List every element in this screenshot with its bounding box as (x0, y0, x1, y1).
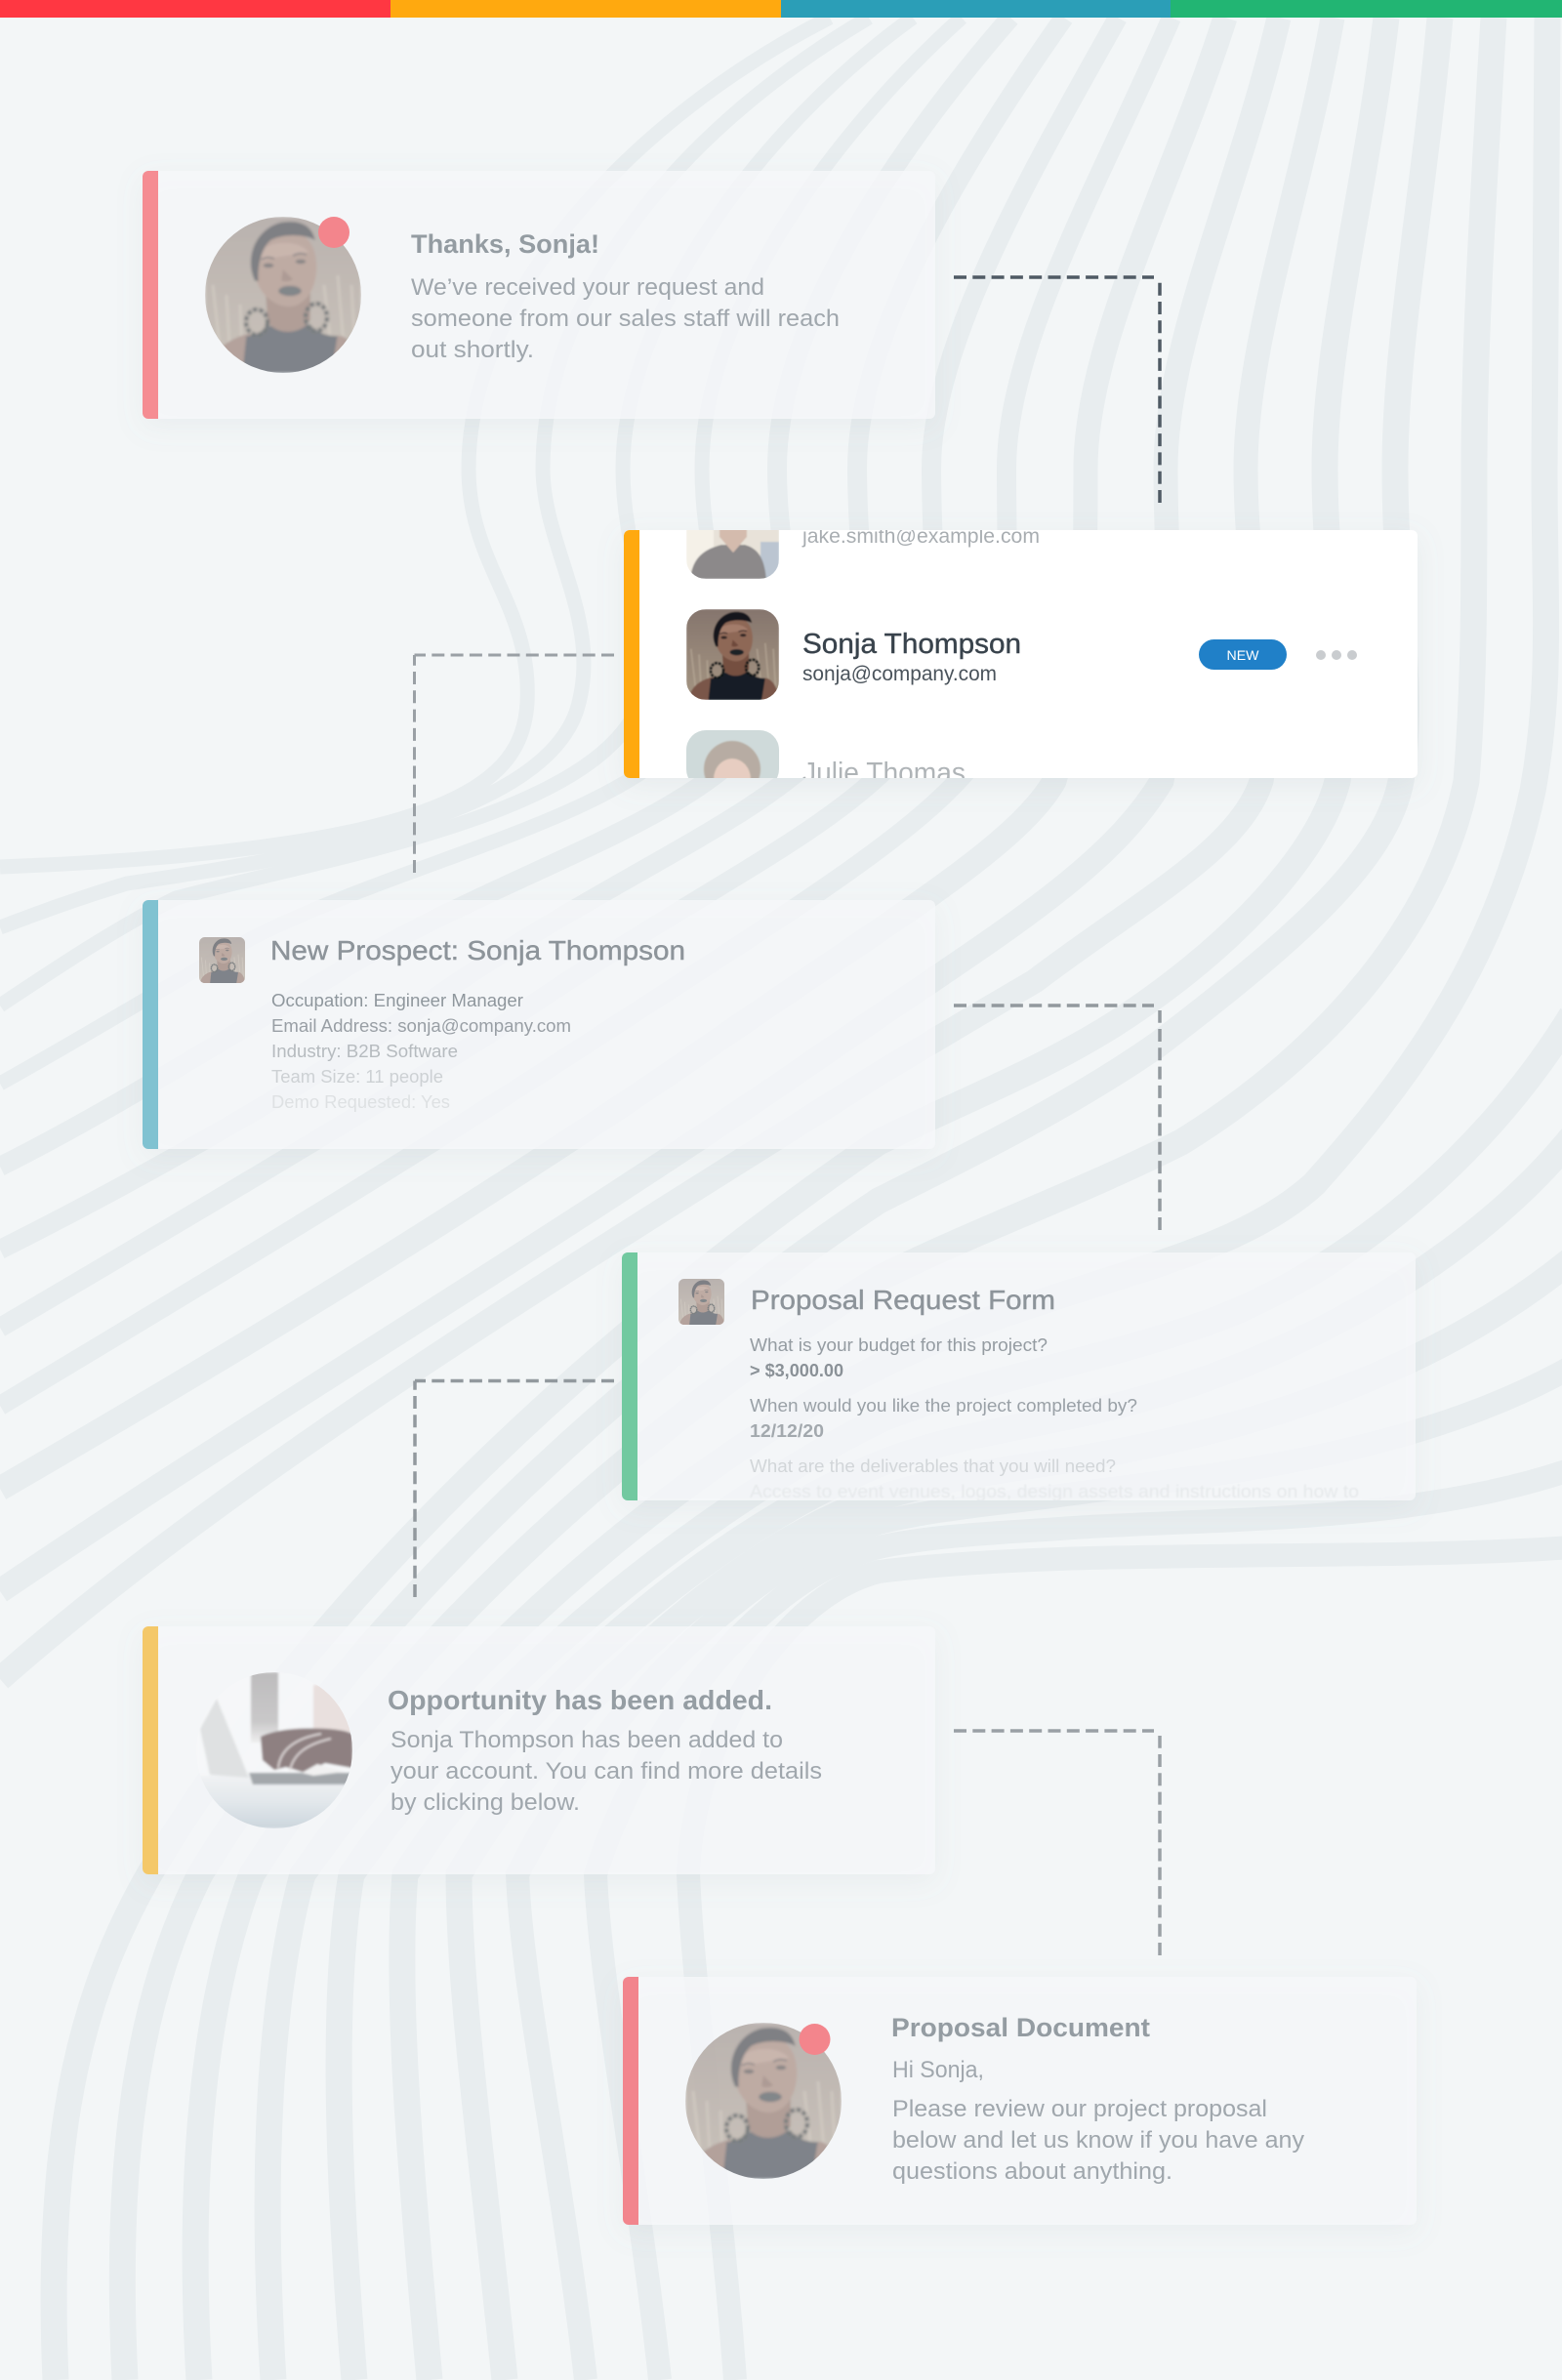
connector: card 3 to card 4 (954, 1005, 1160, 1230)
prospect details: Demo Requested: Yes (271, 1092, 450, 1112)
prospect details (271, 991, 571, 1112)
message: out shortly. (411, 337, 534, 363)
avatar: Sonja (686, 609, 779, 700)
message: Please review our project proposal (892, 2096, 1267, 2122)
row: Sonja (686, 609, 1357, 700)
row: Julie: Julie Thomas (802, 758, 966, 789)
badge: new (1199, 639, 1287, 670)
message (390, 1727, 822, 1816)
notification dot (799, 2024, 830, 2055)
accent bar (624, 530, 639, 778)
connector: card 4 to card 5 (415, 1380, 614, 1597)
panel: thanks card (143, 171, 935, 419)
row: Julie (686, 730, 965, 778)
panel: opportunity card (143, 1626, 822, 1874)
connector: card 2 to card 3 (414, 655, 614, 873)
avatar: Sonja (199, 937, 245, 983)
form answers: 12/12/20 (750, 1421, 824, 1441)
form answers: What are the deliverables that you will need? (750, 1457, 1116, 1476)
photo: laptop and hands (196, 1672, 354, 1828)
prospect details: Email Address: sonja@company.com (271, 1016, 571, 1036)
notification dot (318, 217, 349, 248)
message (892, 2057, 1304, 2185)
heading: Opportunity has been added. (388, 1685, 772, 1715)
message: below and let us know if you have any (892, 2127, 1304, 2154)
name: Sonja Thompson (802, 629, 1021, 660)
prospect details: Industry: B2B Software (271, 1042, 458, 1061)
message: Hi Sonja, (892, 2057, 984, 2083)
accent bar (143, 900, 158, 1149)
accent bar (143, 1626, 158, 1874)
badge: new: NEW (1226, 647, 1259, 663)
form answers: When would you like the project completed by? (750, 1396, 1137, 1416)
row: Jake: jake.smith@example.com (802, 525, 1040, 548)
form answers (750, 1335, 1359, 1501)
form answers: Access to event venues, logos, design assets and instructions on how to (750, 1482, 1359, 1501)
message (411, 274, 840, 363)
panel: new prospect card (143, 900, 935, 1149)
row: Jake (686, 530, 1039, 579)
accent bar (143, 171, 158, 419)
avatar: Sonja (205, 217, 361, 373)
form answers: What is your budget for this project? (750, 1335, 1048, 1355)
message: by clicking below. (390, 1789, 580, 1816)
top colour bar (0, 0, 1562, 18)
message: We’ve received your request and (411, 274, 764, 301)
heading: Thanks, Sonja! (411, 229, 599, 259)
form answers: > $3,000.00 (750, 1361, 843, 1380)
contact rows (686, 530, 1039, 778)
prospect details: Occupation: Engineer Manager (271, 991, 523, 1010)
heading: New Prospect: Sonja Thompson (270, 935, 685, 965)
heading: Proposal Document (891, 2013, 1150, 2042)
icon: more dots (1316, 650, 1357, 660)
accent bar (623, 1977, 638, 2225)
message: someone from our sales staff will reach (411, 306, 840, 332)
avatar: Sonja (678, 1279, 724, 1325)
accent bar (622, 1252, 637, 1500)
connector: card 5 to card 6 (954, 1731, 1160, 1955)
message: your account. You can find more details (390, 1758, 822, 1785)
connector: card 1 to card 2 (954, 277, 1160, 503)
panel: proposal request form card (622, 1252, 1416, 1501)
panel: proposal document card (623, 1977, 1304, 2225)
email: sonja@company.com (802, 663, 997, 685)
message: Sonja Thompson has been added to (390, 1727, 783, 1753)
avatar: Sonja (685, 2023, 842, 2179)
prospect details: Team Size: 11 people (271, 1067, 443, 1087)
heading: Proposal Request Form (751, 1285, 1055, 1315)
message: questions about anything. (892, 2158, 1172, 2185)
panel: contact list card (624, 530, 1418, 780)
